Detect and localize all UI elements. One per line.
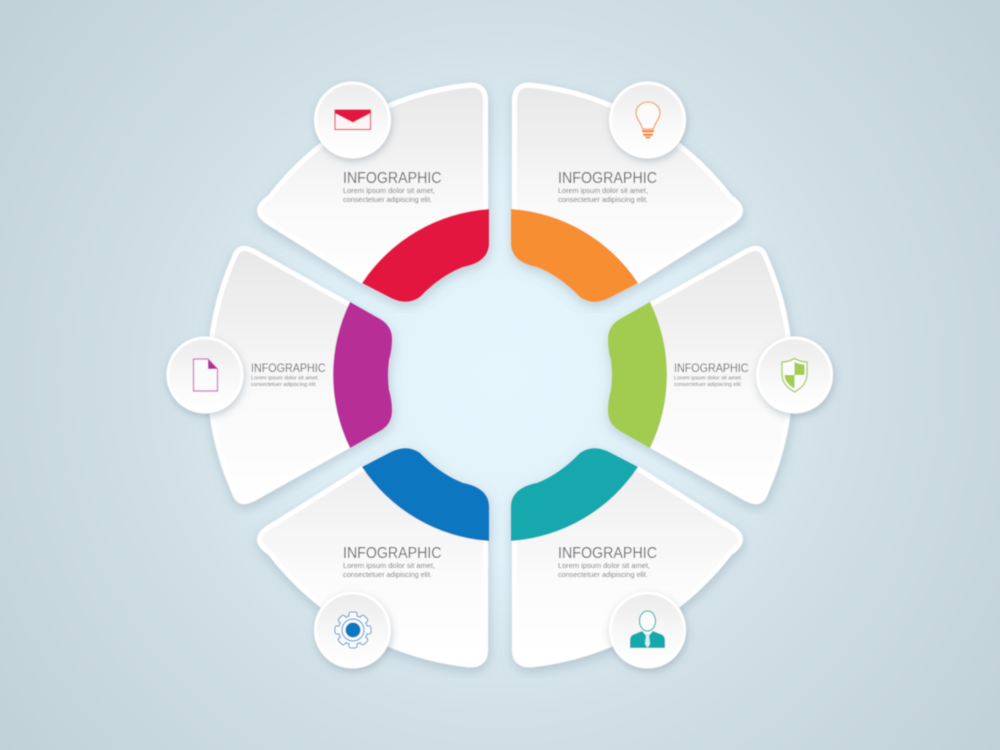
text: left (251, 361, 326, 388)
icon circle: document (168, 338, 242, 412)
text: right: Lorem ipsum dolor sit amet, (674, 376, 742, 382)
panel: left (purple) (168, 248, 392, 502)
panel: bottom left (blue) (260, 448, 489, 667)
text: bottom left (343, 545, 442, 579)
text: right (674, 361, 749, 388)
panel: right (green) (608, 248, 832, 502)
icon circle: envelope (316, 83, 390, 157)
text: top right: INFOGRAPHIC (558, 170, 657, 187)
text: bottom right: Lorem ipsum dolor sit amet, (558, 561, 650, 570)
text: left: INFOGRAPHIC (251, 361, 326, 375)
icon circle: businessman (610, 593, 684, 667)
panel: top right (orange) (511, 83, 740, 302)
text: bottom left: INFOGRAPHIC (343, 545, 442, 562)
text: bottom left: Lorem ipsum dolor sit amet, (343, 561, 435, 570)
text: bottom right: INFOGRAPHIC (558, 545, 657, 562)
icon circle: light bulb (610, 83, 684, 157)
text: top left (343, 170, 442, 204)
text: left: consectetuer adipiscing elit. (251, 382, 317, 388)
text: top right (558, 170, 657, 204)
text: top right: Lorem ipsum dolor sit amet, (558, 186, 648, 195)
text: right: INFOGRAPHIC (674, 361, 749, 375)
text: bottom right (558, 545, 657, 579)
text: bottom right: consectetuer adipiscing elit. (558, 570, 648, 579)
icon circle: gear (316, 593, 390, 667)
panel: top left (red) (260, 83, 489, 302)
text: right: consectetuer adipiscing elit. (674, 382, 742, 388)
text: bottom left: consectetuer adipiscing elit. (343, 570, 432, 579)
text: top right: consectetuer adipiscing elit. (558, 195, 648, 204)
text: top left: Lorem ipsum dolor sit amet, (343, 186, 435, 195)
text: top left: INFOGRAPHIC (343, 170, 442, 187)
text: left: Lorem ipsum dolor sit amet, (251, 376, 319, 382)
panel: bottom right (teal) (511, 448, 740, 667)
icon circle: shield (758, 338, 832, 412)
text: top left: consectetuer adipiscing elit. (343, 195, 432, 204)
